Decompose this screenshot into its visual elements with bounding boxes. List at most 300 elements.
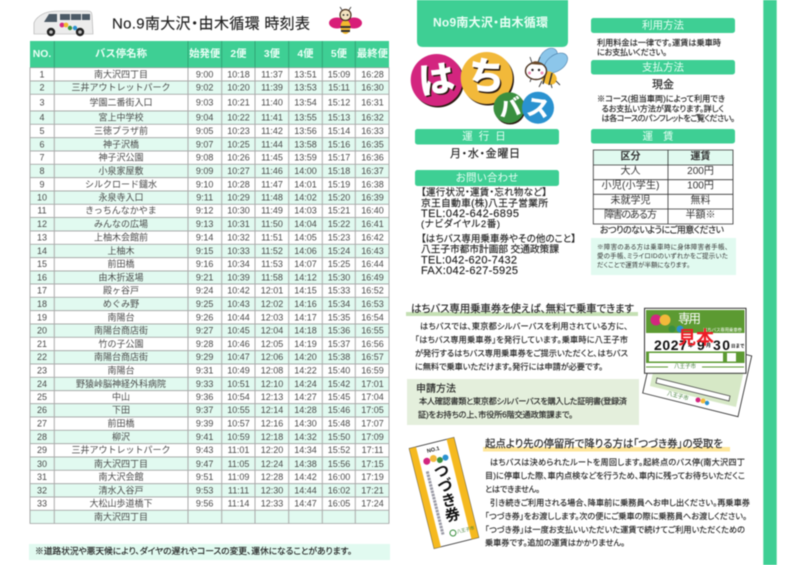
row 13: 上柚木会館前 [94, 232, 148, 243]
row 30: 12:24 [261, 459, 283, 469]
row 4: 10:22 [227, 113, 250, 123]
row 10: 永泉寺入口 [98, 192, 144, 203]
row 23: 16:59 [361, 366, 384, 376]
row 27: 10:57 [227, 418, 250, 428]
heading: はちバス専用乗車券を使えば、無料で乗車できます [411, 302, 634, 315]
section: continuation ticket text [483, 437, 750, 548]
application box [407, 379, 639, 425]
row 11: 15:21 [328, 206, 350, 216]
timetable [30, 41, 389, 524]
row 18 [30, 297, 389, 311]
body text: 引き続きご利用される場合、降車前に乗務員へお申し出ください。再乗車券 [490, 498, 750, 508]
row 23: 14:22 [294, 366, 317, 376]
row 2 [30, 81, 389, 94]
row 11: 11 [37, 206, 47, 216]
row 18: めぐみ野 [103, 299, 139, 309]
row 4: 4 [39, 113, 45, 123]
footnote [29, 544, 390, 560]
row 23: 12:08 [261, 366, 283, 376]
contact: city office: FAX:042-627-5925 [421, 265, 518, 277]
application box: 申請方法 [416, 382, 456, 395]
row 6: 6 [39, 139, 45, 149]
contact: city office: 八王子市都市計画部 交通政策課 [421, 242, 559, 256]
fare note: だくことで運賃が半額になります。 [597, 260, 690, 269]
panel: payment: 支払方法 [642, 60, 684, 74]
row 13: 10:32 [227, 233, 250, 243]
contact: operator: 京王自動車(株)八王子営業所 [421, 196, 548, 210]
row 20: 9:27 [196, 326, 213, 336]
row 33: 9:56 [196, 499, 213, 509]
row 21: 竹の子公園 [98, 338, 144, 349]
illustration: pass front: 専用 [678, 312, 701, 326]
row 19: 19 [37, 312, 47, 322]
logo: hachi bus: バ [497, 94, 523, 122]
panel: payment: るお支払い方法が異なります。詳しく [601, 104, 724, 114]
row 8: 15:18 [328, 166, 350, 176]
row 2: 13:53 [294, 83, 317, 93]
row 27: 9:39 [196, 418, 213, 428]
row 3: 3 [39, 98, 45, 108]
row 32: 清水入谷戸 [98, 485, 144, 496]
row 33: 16:05 [328, 499, 350, 509]
body text: はちバスでは、東京都シルバーバスを利用されている方に、 [420, 321, 628, 331]
row 31: 南大沢会館 [98, 471, 144, 482]
fare note [591, 238, 736, 275]
row 14: 9:15 [196, 246, 213, 256]
row 20: 15:36 [328, 326, 350, 336]
row 5: 10:23 [227, 126, 250, 136]
row 17 [30, 284, 389, 297]
row 8: 14:00 [294, 166, 317, 176]
row 31: 14:42 [294, 472, 317, 482]
row 27: 15:48 [328, 418, 350, 428]
row 16: 14:12 [294, 272, 317, 282]
panel: how to use: 利用料金は一律です。運賃は乗車時 [597, 38, 721, 48]
logo: hachi bus: ち [466, 56, 509, 103]
logo: hachi bus: ち [464, 54, 508, 101]
row 30: 30 [37, 459, 47, 469]
row 21: 9:28 [196, 339, 213, 349]
fare table: 半額※ [686, 208, 716, 221]
row 29: 15:52 [328, 445, 350, 455]
row 1: 9:00 [196, 69, 213, 79]
row 13: 11:51 [261, 233, 283, 243]
row 2: 9:02 [196, 83, 213, 93]
row 1: 11:37 [261, 69, 283, 79]
row 5: 13:56 [294, 126, 317, 136]
row 3 [30, 94, 389, 111]
row 27: 12:16 [261, 418, 283, 428]
row 16 [30, 271, 389, 284]
row 28: 28 [37, 432, 47, 442]
row 16: 由木折返場 [98, 271, 144, 282]
panel: operating days: 運行日 [462, 130, 512, 142]
section: free-ride pass [406, 302, 639, 425]
row 21: 21 [37, 339, 47, 349]
row 4: 9:04 [196, 113, 213, 123]
row 4: 宮上中学校 [98, 112, 144, 123]
panel: fares: おつりのないようにご用意ください [600, 224, 724, 235]
row 11: 11:49 [261, 206, 283, 216]
body text: はちバスは決められたルートを周回します。起終点のバス停(南大沢四丁 [490, 457, 745, 467]
row 22: 16:57 [361, 352, 384, 362]
row 8: 小泉家屋敷 [98, 165, 144, 176]
row 25: 14:27 [294, 392, 317, 402]
row 20 [30, 324, 389, 337]
illustration: pass front: 八王子市 [674, 362, 696, 370]
row 7: 11:45 [261, 153, 283, 163]
row 16: 9:21 [196, 272, 213, 282]
row 26: 26 [37, 405, 47, 415]
row 10: 11:48 [261, 193, 283, 203]
row 32: 32 [37, 486, 47, 496]
row 14: 上柚木 [107, 245, 135, 256]
row 13: 9:14 [196, 233, 213, 243]
fare table: 未就学児 [610, 194, 650, 206]
row 23 [30, 364, 389, 377]
logo: hachi bus: ス [525, 94, 551, 122]
row 5: 9:05 [196, 126, 213, 136]
row 14: 14 [37, 246, 47, 256]
row 7: 13:59 [294, 153, 317, 163]
row 19: 15:35 [328, 312, 350, 322]
row 14: 10:33 [227, 246, 250, 256]
body text [485, 457, 750, 548]
row 31: 12:28 [261, 472, 283, 482]
row 5: 15:14 [328, 126, 350, 136]
row 28: 17:09 [361, 432, 384, 442]
row 15: 15 [37, 259, 47, 269]
row 9: 9 [39, 179, 45, 189]
row 26: 10:55 [227, 405, 250, 415]
panel: contact: お問い合わせ [456, 171, 518, 184]
row 32: 17:21 [361, 486, 384, 496]
row 5: 11:42 [261, 126, 283, 136]
illustration: continuation ticket: き [440, 491, 458, 511]
row 8: 8 [39, 166, 45, 176]
illustration: continuation ticket: つ [432, 462, 451, 482]
fare table: 運賃 [690, 150, 710, 162]
contact: operator [421, 186, 548, 230]
row 15: 16:44 [361, 259, 384, 269]
row 29 [30, 444, 389, 457]
row 17: 14:15 [294, 286, 317, 296]
row 2: 10:20 [227, 83, 250, 93]
row 8 [30, 164, 389, 178]
row 26: 12:14 [261, 405, 283, 415]
row 12: 11:50 [261, 219, 283, 229]
body text: 目)に停車した際、車内点検などを行うため、車内に残ってお待ちいただくこ [485, 470, 745, 480]
row 27 [30, 417, 389, 430]
row 29: 11:01 [228, 445, 249, 455]
table header [30, 41, 389, 68]
row 16: 11:58 [261, 272, 283, 282]
row 3: 9:03 [196, 98, 213, 108]
row 23: 23 [37, 366, 47, 376]
row 24: 14:24 [294, 379, 317, 389]
row 2: 2 [39, 83, 45, 93]
row 24: 24 [37, 379, 47, 389]
row 31: 17:19 [361, 472, 384, 482]
row 18: 14:16 [294, 299, 317, 309]
fare table: 障害のある方 [604, 208, 657, 221]
logo: hachi bus: は [416, 57, 457, 102]
icon: community bus [34, 11, 93, 36]
illustration: pass front: 見本 [678, 328, 714, 348]
row 11: 9:12 [196, 206, 213, 216]
row 28: 柳沢 [112, 431, 130, 442]
fare table: 無料 [690, 194, 710, 206]
row 29: 9:43 [196, 445, 213, 455]
body text: 「つづき券」をお渡しします。次の便にご乗車の際に乗務員へお渡しください。 [485, 511, 747, 521]
row 11 [30, 204, 389, 218]
row 1 [30, 68, 389, 81]
contact: city office: TEL:042-620-7432 [421, 255, 517, 267]
row 25 [30, 391, 389, 404]
row 10: 9:11 [196, 193, 213, 203]
row 2: 16:30 [361, 83, 384, 93]
row 5: 5 [39, 126, 45, 136]
row 32 [30, 484, 389, 497]
body text: が発行するはちバス専用乗車券をご提示いただくと、はちバス [415, 348, 628, 358]
row 12: 9:13 [196, 219, 213, 229]
row 26: 14:28 [294, 405, 317, 415]
row 32: 14:44 [294, 486, 317, 496]
row 9 [30, 178, 389, 191]
row 24: 15:42 [328, 379, 350, 389]
row 24: 9:33 [196, 379, 213, 389]
row 34 [30, 510, 389, 524]
row 1: 10:18 [227, 69, 250, 79]
row 21: 15:37 [328, 339, 350, 349]
row 24: 10:51 [227, 379, 250, 389]
row 33: 12:33 [261, 499, 283, 509]
row 27: 前田橋 [107, 418, 135, 428]
contact: operator: TEL:042-642-6895 [421, 208, 519, 220]
row 3: 学園二番街入口 [89, 96, 153, 108]
logo: hachi bus [411, 52, 554, 124]
panel: payment [591, 60, 735, 123]
row 34: 南大沢四丁目 [94, 511, 148, 522]
row 28: 14:32 [294, 432, 317, 442]
row 19: 14:17 [294, 312, 317, 322]
row 17: 17 [37, 286, 47, 296]
fare table: 区分 [620, 150, 640, 162]
panel: payment: 現金 [652, 78, 674, 91]
row 5: 三徳プラザ前 [94, 125, 148, 136]
row 33: 11:14 [228, 499, 249, 509]
row 25: 25 [37, 392, 47, 402]
row 7: 7 [39, 153, 45, 163]
row 3: 15:12 [328, 98, 350, 108]
illustration: pass front: はちバス専用乗車券 [703, 326, 742, 334]
panel: how to use [591, 18, 735, 57]
row 17: 12:01 [261, 286, 283, 296]
row 14: 16:43 [361, 246, 384, 256]
row 12 [30, 218, 389, 231]
contact: operator: 【運行状況・運賃・忘れ物など】 [421, 186, 547, 198]
row 12: 14:04 [294, 219, 317, 229]
row 23: 15:40 [328, 366, 350, 376]
row 7: 15:17 [328, 153, 350, 163]
row 26: 17:05 [361, 405, 384, 415]
body text: 「つづき券」は一度お支払いいただいた運賃で続けてご利用いただくための [485, 524, 745, 534]
row 26: 9:37 [196, 405, 213, 415]
row 24: 12:10 [261, 379, 283, 389]
row 22: 9:29 [196, 352, 213, 362]
row 22: 22 [37, 352, 47, 362]
row 20: 16:55 [361, 326, 384, 336]
row 2: 11:39 [261, 83, 283, 93]
row 30 [30, 457, 389, 470]
row 21: 14:19 [294, 339, 317, 349]
row 18: 12:02 [261, 299, 283, 309]
row 8: 9:09 [196, 166, 213, 176]
row 31: 16:00 [328, 472, 350, 482]
row 13: 15:23 [328, 233, 350, 243]
row 7: 10:26 [227, 153, 250, 163]
row 12: 16:41 [361, 219, 384, 229]
row 6: 13:58 [294, 139, 317, 149]
row 7: 神子沢公園 [98, 152, 144, 163]
row 30: 南大沢四丁目 [94, 458, 148, 469]
row 1: 16:28 [361, 69, 384, 79]
row 22: 南陽台商店街 [94, 351, 148, 362]
footnote: ※道路状況や悪天候により、ダイヤの遅れやコースの変更、運休になることがあります。 [35, 545, 352, 556]
row 30: 11:05 [228, 459, 249, 469]
row 11: 16:40 [361, 206, 384, 216]
row 30: 14:38 [294, 459, 317, 469]
row 10: 15:20 [328, 193, 350, 203]
row 6: 9:07 [196, 139, 213, 149]
row 11: 14:03 [294, 206, 317, 216]
row 32: 9:53 [196, 486, 213, 496]
row 22: 10:47 [227, 352, 250, 362]
row 12: 15:22 [328, 219, 350, 229]
table header: 3便 [264, 47, 281, 60]
row 25: 15:45 [328, 392, 350, 402]
row 18: 16:53 [361, 299, 384, 309]
row 9: 14:01 [294, 179, 317, 189]
row 20: 20 [37, 326, 47, 336]
row 12: みんなの広場 [94, 218, 148, 229]
body text: 「はちバス専用乗車券」を発行しています。乗車時に八王子市 [415, 334, 628, 344]
panel: fares [591, 129, 736, 275]
panel: contact [415, 170, 576, 277]
row 1: 1 [39, 69, 45, 79]
row 20: 12:04 [261, 326, 283, 336]
row 20: 10:45 [227, 326, 250, 336]
row 29: 17:11 [362, 445, 383, 455]
table header: 4便 [297, 47, 314, 60]
row 13 [30, 231, 389, 244]
row 11: きっちんなかやま [85, 206, 157, 216]
row 17: 15:33 [328, 286, 350, 296]
row 33: 33 [37, 499, 47, 509]
body text [415, 321, 628, 372]
row 2: 15:11 [328, 83, 350, 93]
row 26: 下田 [112, 405, 130, 415]
row 24: 野猿峠脳神経外科病院 [76, 378, 166, 389]
body text: に無料で乗車いただけます。発行には申請が必要です。 [415, 362, 603, 372]
row 13: 14:05 [294, 233, 317, 243]
row 6: 11:44 [261, 139, 283, 149]
row 21 [30, 337, 389, 351]
row 16: 16 [37, 272, 47, 282]
row 25: 12:13 [261, 392, 283, 402]
row 17: 10:42 [227, 286, 250, 296]
row 33: 17:24 [361, 499, 384, 509]
row 27: 14:30 [294, 418, 317, 428]
contact: city office: 【はちバス専用乗車券やその他のこと】 [421, 233, 576, 245]
illustration: continuation ticket: づ [436, 476, 455, 497]
row 7: 9:08 [196, 153, 213, 163]
fare table: 200円 [687, 166, 714, 177]
row 23: 南陽台 [107, 365, 135, 376]
row 30: 17:15 [361, 459, 384, 469]
row 9: 16:38 [361, 179, 384, 189]
row 19 [30, 311, 389, 324]
row 6: 16:35 [361, 139, 384, 149]
row 28: 15:50 [328, 432, 350, 442]
application box: 本人確認書類と東京都シルバーバスを購入した証明書(登録済 [419, 396, 627, 406]
row 16: 15:30 [328, 272, 350, 282]
table header: 5便 [331, 47, 348, 60]
illustration: pass back [643, 332, 752, 417]
illustration: pass back: 八王子市 [666, 389, 690, 402]
row 27: 27 [37, 418, 47, 428]
illustration: continuation ticket: 八王子市 [456, 524, 476, 535]
contact: operator: (ナビダイヤル2番) [421, 218, 500, 230]
row 15 [30, 258, 389, 271]
row 25: 17:04 [361, 392, 384, 402]
row 18: 9:25 [196, 299, 213, 309]
row 10: 16:39 [361, 193, 384, 203]
row 10: 10 [37, 193, 47, 203]
illustration: continuation ticket: 券 [443, 505, 462, 526]
row 13: 16:42 [361, 233, 384, 243]
row 28: 9:41 [196, 432, 213, 442]
contact: city office [421, 233, 576, 277]
row 15: 11:53 [261, 259, 283, 269]
illustration: continuation ticket [409, 437, 479, 549]
row 4: 15:13 [328, 113, 350, 123]
row 31: 11:09 [228, 472, 249, 482]
row 12: 12 [37, 219, 47, 229]
table header: バス停名称 [95, 47, 148, 60]
row 23: 10:49 [227, 366, 250, 376]
fare table: 100円 [687, 180, 714, 192]
table header: 2便 [230, 47, 247, 60]
right edge bar [763, 0, 777, 565]
row 17: 16:52 [361, 286, 384, 296]
row 10 [30, 191, 389, 204]
row 5: 16:33 [361, 126, 384, 136]
row 19: 9:26 [196, 312, 213, 322]
row 25: 中山 [112, 391, 130, 402]
illustration: pass front: 月 [706, 343, 711, 349]
row 16: 16:49 [361, 272, 384, 282]
row 8: 11:46 [261, 166, 283, 176]
row 24: 17:01 [361, 379, 384, 389]
row 20: 14:18 [294, 326, 317, 336]
row 16: 10:39 [227, 272, 250, 282]
row 25: 9:36 [196, 392, 213, 402]
row 9: 9:10 [196, 179, 213, 189]
row 31 [30, 470, 389, 484]
panel: payment: は各コースのパンフレットをご覧ください。 [602, 113, 735, 123]
title: No.9南大沢・由木循環 時刻表 [112, 16, 310, 32]
